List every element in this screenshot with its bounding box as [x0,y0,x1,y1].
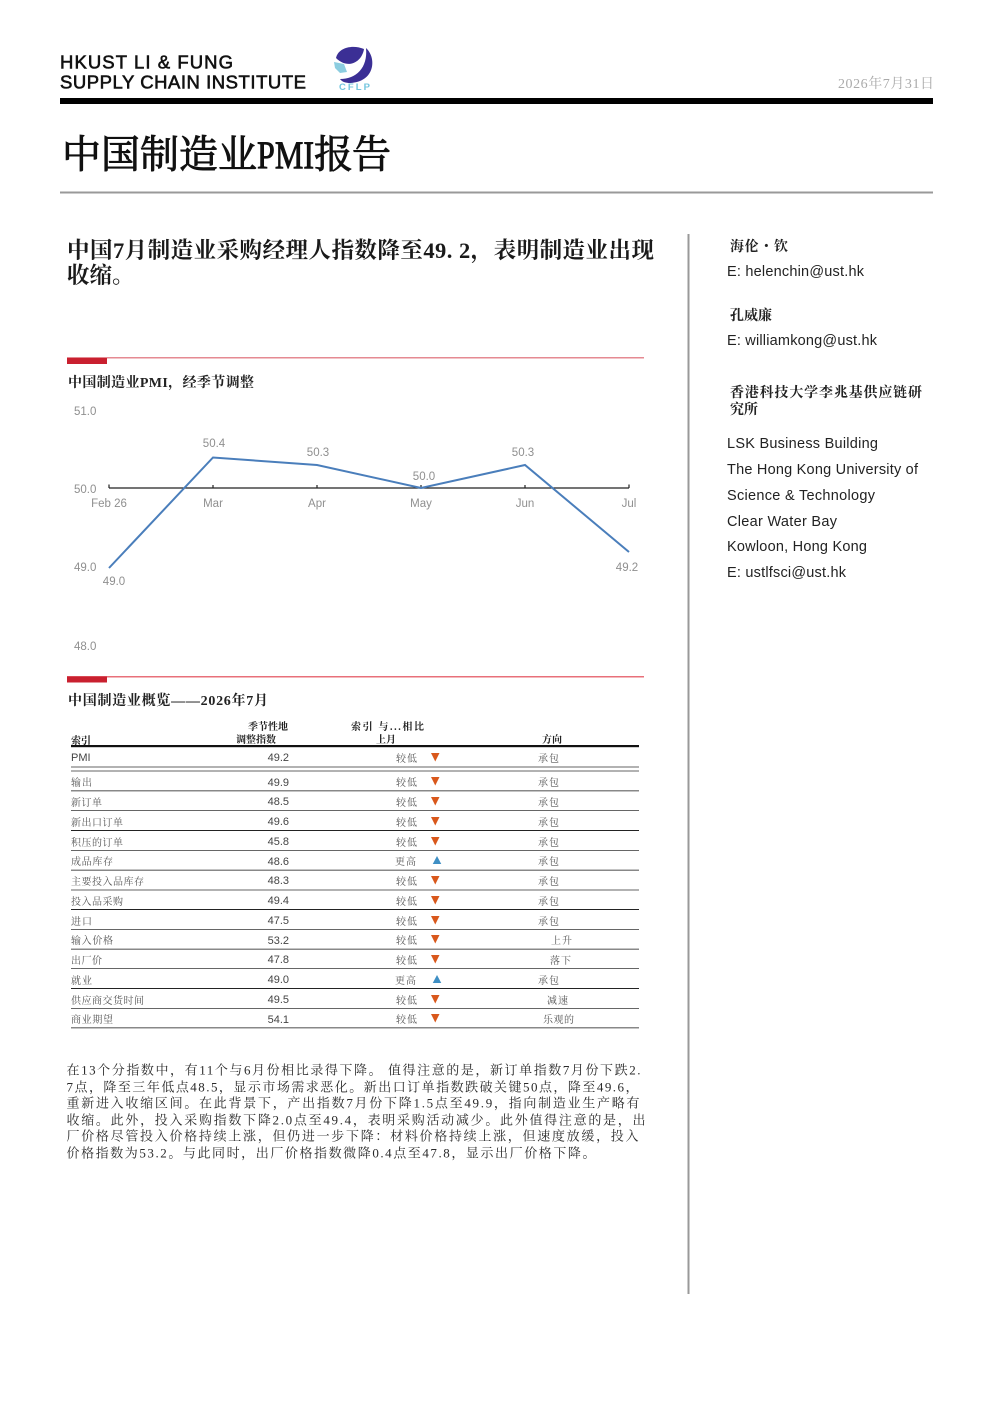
commentary text: 7点，降至三年低点48.5，显示市场需求恶化。新出口订单指数跌破关键50点，降至49.6， [66,1080,638,1096]
table comparison: 更高 [395,974,416,987]
table header: 索引 与...相比 [350,720,424,733]
header [60,47,934,93]
table row names: 出厂价 [71,954,102,967]
table values: 49.6 [268,816,289,828]
panel: PMI chart [67,357,644,653]
line chart: Feb 26 [91,498,127,510]
commentary text: 厂价格尽管投入价格持续上涨，但仍进一步下降：材料价格持续上涨，但速度放缓，投入 [66,1128,638,1144]
table comparison: 较低 [396,954,417,967]
institute address: 香港科技大学李兆基供应链研 [730,384,922,401]
table row names: 新出口订单 [71,816,123,829]
table values: 48.3 [268,875,289,887]
line chart: Mar [203,498,223,510]
table direction [538,752,574,1026]
table direction: 承包 [538,875,559,888]
table direction: 承包 [538,855,559,868]
table values: 47.8 [268,954,289,966]
contact: William Kong [727,307,878,349]
table direction: 承包 [538,974,559,987]
table comparison: 较低 [396,895,417,908]
institute address: E: ustlfsci@ust.hk [727,565,847,581]
table comparison: 较低 [396,915,417,928]
table comparison: 较低 [396,816,417,829]
sidebar: contacts [727,238,922,581]
table values: 49.5 [268,994,289,1006]
table direction: 承包 [538,836,559,849]
institute address: 究所 [730,401,758,418]
table comparison: 更高 [395,855,416,868]
table values: 53.2 [268,935,289,947]
table values: 49.4 [268,895,289,907]
table values: 54.1 [268,1014,289,1026]
institute name [60,52,306,92]
table heading: 中国制造业概览——2026年7月 [68,692,268,709]
institute name: SUPPLY CHAIN INSTITUTE [60,72,306,92]
table row names: 供应商交货时间 [71,994,144,1007]
line chart: Apr [308,498,326,510]
institute address: The Hong Kong University of [727,462,919,478]
table comparison: 较低 [396,1013,417,1026]
commentary text: 在13个分指数中，有11个与6月份相比录得下降。 值得注意的是，新订单指数7月份下跌2. [66,1062,640,1078]
institute address [727,384,922,581]
institute address: Clear Water Bay [727,514,838,530]
headline: 收缩。 [67,263,135,288]
line chart: 50.0 [74,484,96,496]
line chart: Jul [622,498,636,510]
table direction: 承包 [538,796,559,809]
table direction: 承包 [538,776,559,789]
panel: overview table [67,676,644,1028]
table values: 45.8 [268,836,289,848]
table values: 48.5 [268,796,289,808]
institute address: LSK Business Building [727,436,878,452]
table header: 季节性地 [248,720,288,733]
table row names: 主要投入品库存 [71,875,144,888]
institute address: Kowloon, Hong Kong [727,539,867,555]
table values: 47.5 [268,915,289,927]
icon: CFLP logo: CFLP [339,82,371,93]
line chart: Jun [516,498,534,510]
institute name: HKUST LI & FUNG [60,52,233,72]
table direction: 上升 [551,934,572,947]
line chart: 50.3 [307,447,329,459]
line chart: 49.0 [103,576,125,588]
table row names: 进口 [71,915,92,928]
title [62,134,391,177]
table header: 上月 [376,733,396,746]
table row names: 新订单 [71,796,102,809]
headline: 中国7月制造业采购经理人指数降至49. 2，表明制造业出现 [67,238,654,264]
table row names: 就业 [71,974,92,987]
table values: 48.6 [268,856,289,868]
table row names: 成品库存 [71,855,113,868]
table comparison: 较低 [396,776,417,789]
table values: 49.0 [268,974,289,986]
table row names: 商业期望 [71,1013,113,1026]
table direction: 落下 [550,954,571,967]
contact: Helen Chin: 海伦・钦 [730,238,788,255]
table row names: PMI [71,752,91,764]
contact: William Kong: E: williamkong@ust.hk [727,333,878,349]
table values [268,752,289,1026]
title: PMI [257,134,314,177]
icon: CFLP logo [334,47,372,93]
institute address: Science & Technology [727,488,876,504]
table direction: 承包 [538,816,559,829]
report date: 2026年7月31日 [838,75,934,92]
table comparison: 较低 [396,875,417,888]
table direction: 承包 [538,752,559,765]
line chart: 49.0 [74,562,96,574]
commentary text: 重新进入收缩区间。在此背景下，产出指数7月份下降1.5点至49.9，指向制造业生产略有 [66,1096,640,1112]
contact: Helen Chin [727,238,865,280]
table row names: 投入品采购 [71,895,123,908]
line chart: 50.4 [203,438,226,450]
table comparison: 较低 [396,752,417,765]
table comparison [395,752,417,1026]
line chart: 50.0 [413,471,435,483]
table row names: 输出 [71,776,92,789]
table header: 调整指数 [236,733,276,746]
table comparison: 较低 [396,836,417,849]
commentary text [66,1062,646,1162]
table row names [71,752,144,1026]
table header: 索引 [70,734,91,747]
table comparison: 较低 [396,796,417,809]
table direction: 乐观的 [543,1014,574,1026]
table comparison: 较低 [396,934,417,947]
line chart: 48.0 [74,641,96,653]
sidebar divider [688,234,690,1294]
icons: trend arrows [431,753,441,1022]
headline [67,238,654,288]
line chart: 49.2 [616,562,638,574]
table header: 方向 [542,733,562,746]
table header [70,720,562,747]
table row names: 积压的订单 [71,836,123,849]
title: 报告 [314,134,391,177]
line chart: 50.3 [512,447,534,459]
chart heading: 中国制造业PMI，经季节调整 [68,374,254,391]
table comparison: 较低 [396,994,417,1007]
line chart: May [410,498,432,510]
table values: 49.2 [268,752,289,764]
contact: Helen Chin: E: helenchin@ust.hk [727,264,865,280]
line chart [74,406,638,653]
table values: 49.9 [268,777,289,789]
commentary text: 价格指数为53.2。与此同时，出厂价格指数微降0.4点至47.8，显示出厂价格下降。 [66,1146,596,1162]
contact: William Kong: 孔威廉 [730,307,772,324]
table direction: 承包 [538,915,559,928]
table row names: 输入价格 [71,934,113,947]
table direction: 承包 [538,895,559,908]
table direction: 减速 [547,994,568,1007]
table rules [71,745,639,1028]
line chart: 51.0 [74,406,96,418]
title: 中国制造业 [62,134,257,177]
commentary text: 收缩。此外，投入采购指数下降2.0点至49.4，表明采购活动减少。此外值得注意的是，出 [66,1112,646,1128]
